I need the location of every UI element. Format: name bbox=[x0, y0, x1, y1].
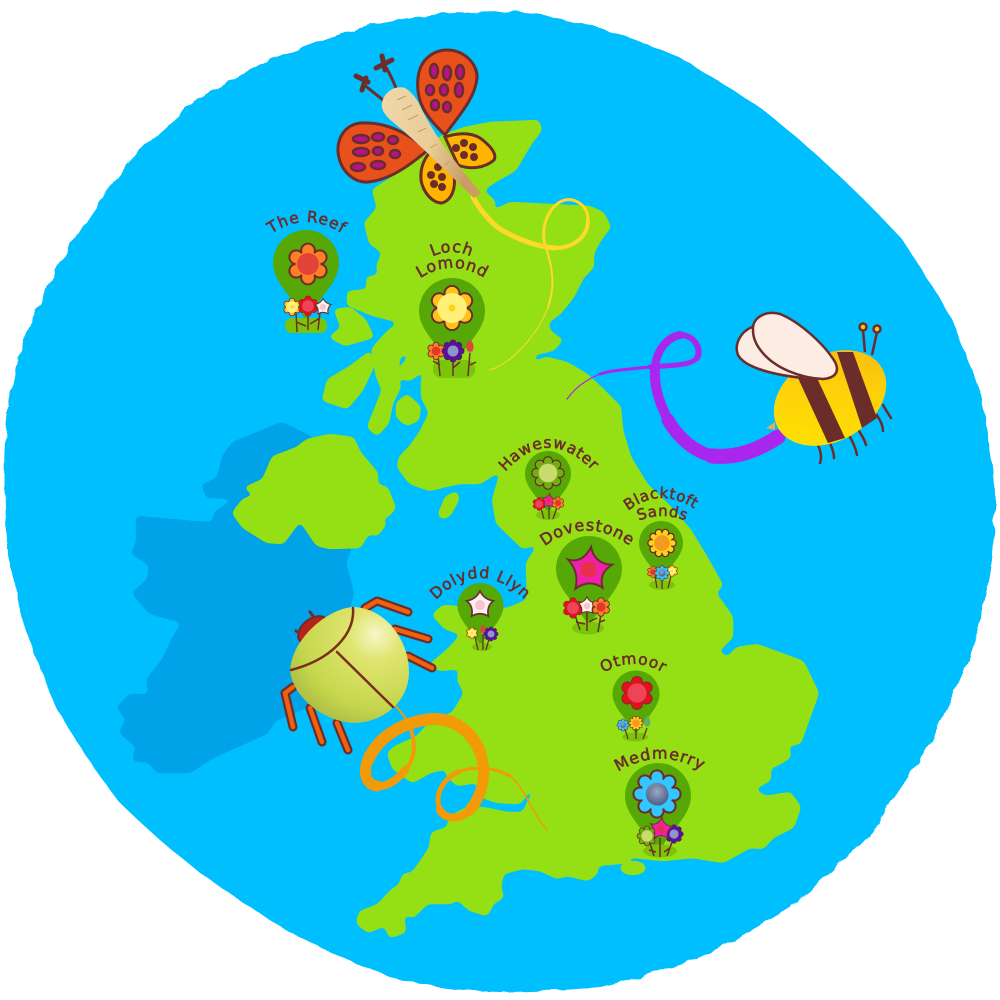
flower cluster bbox=[637, 817, 683, 857]
Isle of Wight bbox=[621, 862, 645, 874]
ground bbox=[622, 732, 648, 742]
flower icon bbox=[289, 244, 327, 284]
flower cluster bbox=[467, 625, 498, 650]
ground bbox=[536, 510, 560, 520]
label: Dolydd Llyn bbox=[429, 566, 528, 600]
label: Lomond: Lomond bbox=[415, 258, 490, 278]
pin: Dovestone bbox=[539, 520, 633, 634]
Isle of Man bbox=[439, 492, 458, 518]
flower icon bbox=[568, 547, 612, 589]
pin: Loch Lomond bbox=[419, 241, 485, 378]
ribbon: orange trail bbox=[365, 705, 547, 830]
bee legs bbox=[818, 405, 891, 463]
flower cluster bbox=[284, 296, 331, 332]
beetle legs bbox=[285, 601, 432, 750]
butterfly upper wing bbox=[418, 50, 477, 135]
flower icon bbox=[532, 457, 564, 489]
bee body bbox=[757, 331, 903, 465]
label: Blacktoft bbox=[622, 486, 698, 510]
label: The Reef bbox=[265, 210, 348, 232]
parsnip body bbox=[382, 87, 481, 198]
butterfly left wing bbox=[338, 123, 428, 182]
flower cluster bbox=[648, 565, 677, 589]
flower icon bbox=[467, 591, 493, 616]
beetle shell lines bbox=[291, 608, 393, 707]
beetle apple shell bbox=[290, 607, 409, 723]
butterfly antennae bbox=[356, 56, 396, 100]
flower cluster bbox=[533, 493, 564, 519]
butterfly lower right wing bbox=[445, 134, 495, 168]
butterfly lower left wing bbox=[421, 150, 454, 203]
Ireland (dark sea tone) bbox=[118, 423, 353, 772]
pin: Medmerry bbox=[614, 747, 706, 858]
ribbon: yellow trail bbox=[473, 197, 588, 370]
bee front wing bbox=[753, 313, 837, 379]
pin: Dolydd Llyn bbox=[429, 566, 528, 651]
beetle head bbox=[293, 611, 333, 649]
label: Dovestone bbox=[539, 520, 633, 546]
flower icon bbox=[633, 770, 681, 818]
bee tail bbox=[766, 422, 775, 430]
pin: Blacktoft Sands bbox=[622, 486, 698, 590]
ground bbox=[472, 643, 492, 651]
flower cluster bbox=[617, 716, 650, 739]
butterfly with parsnip body bbox=[338, 50, 495, 203]
ribbon: purple trail bbox=[567, 335, 778, 456]
bee back wing bbox=[737, 327, 803, 378]
beetle with apple body bbox=[285, 601, 432, 750]
label: Haweswater bbox=[498, 438, 599, 471]
Northern Ireland bbox=[233, 435, 395, 548]
bee with squash body bbox=[737, 313, 903, 465]
bee antennae bbox=[860, 324, 880, 355]
label: Sands: Sands bbox=[636, 506, 688, 520]
ground bbox=[643, 844, 677, 858]
ground bbox=[433, 360, 475, 378]
label: Medmerry bbox=[614, 747, 706, 772]
pin: The Reef bbox=[265, 210, 348, 333]
pin: Otmoor bbox=[600, 655, 668, 742]
flower cluster bbox=[428, 340, 476, 376]
label: Otmoor bbox=[600, 655, 668, 672]
ground bbox=[285, 318, 327, 333]
flower icon bbox=[648, 529, 676, 557]
bee stripes bbox=[798, 352, 877, 443]
Scottish islands bbox=[323, 308, 645, 874]
label: Loch bbox=[430, 241, 472, 256]
ground bbox=[649, 580, 675, 590]
pin: Haweswater bbox=[498, 438, 599, 520]
flower icon bbox=[432, 286, 472, 330]
ground bbox=[572, 622, 604, 634]
Great Britain mainland bbox=[348, 121, 818, 937]
flower cluster bbox=[564, 597, 609, 632]
flower icon bbox=[622, 677, 652, 709]
